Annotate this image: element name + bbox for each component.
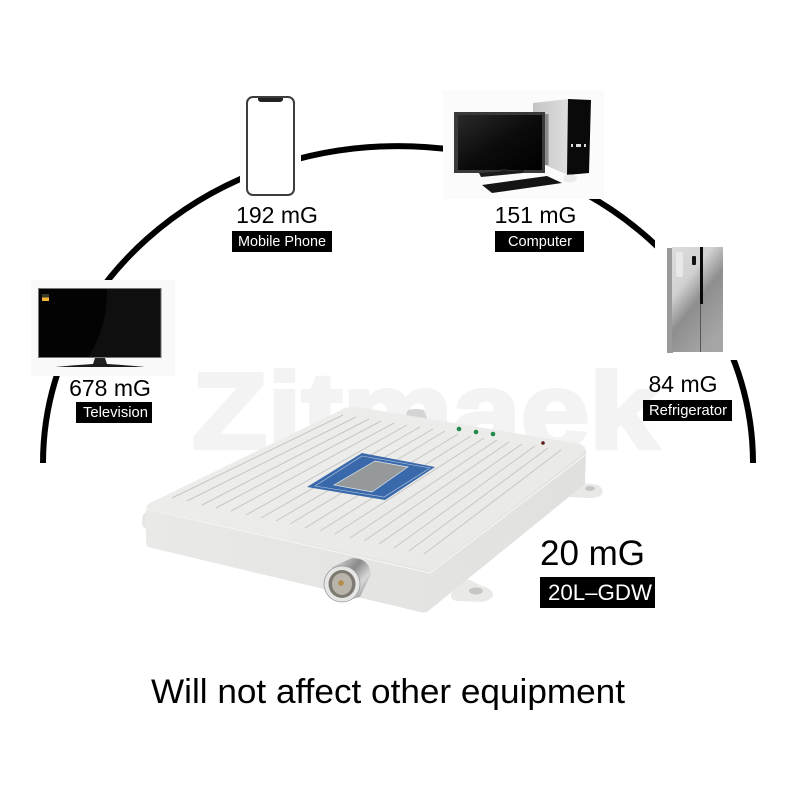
- panel: computer: [443, 90, 604, 252]
- icon: television: [38, 288, 161, 367]
- panel: mobile phone: [232, 92, 332, 252]
- panel: signal booster product: [142, 406, 602, 612]
- display panel inner border: [315, 456, 430, 497]
- keyboard: [482, 176, 562, 193]
- housing top: [146, 406, 585, 570]
- panel: television: [31, 280, 175, 423]
- mouse: [563, 174, 577, 182]
- label: computer: Computer: [508, 234, 572, 250]
- label: refrigerator: [643, 400, 732, 421]
- icon: computer: [454, 99, 591, 193]
- label: television: [76, 402, 152, 423]
- value: computer: 151 mG: [495, 202, 576, 228]
- vent slots: [172, 415, 561, 554]
- value: refrigerator: 84 mG: [648, 371, 718, 397]
- mounting tab right: [566, 484, 602, 498]
- label: mobile phone: [232, 231, 332, 252]
- product value: 20 mG: [540, 534, 645, 573]
- front N connector: [324, 558, 371, 602]
- label: computer: [495, 231, 584, 252]
- rear connector: [406, 409, 428, 420]
- value: mobile phone: 192 mG: [236, 202, 318, 228]
- mounting tab front: [451, 580, 493, 602]
- housing side: [146, 450, 586, 612]
- icon: mobile phone: [247, 97, 294, 195]
- tab holes: [469, 486, 595, 594]
- product model label: 20L–GDW: [548, 580, 652, 605]
- label: refrigerator: Refrigerator: [649, 403, 727, 419]
- refrigerator mask: [655, 200, 755, 360]
- watermark: Zitmaek: [192, 350, 659, 471]
- blue display panel: [307, 453, 435, 500]
- status LEDs: [457, 427, 545, 445]
- value: television: 678 mG: [69, 375, 151, 401]
- caption: Will not affect other equipment: [151, 673, 626, 711]
- arc connecting the devices: [43, 146, 753, 463]
- tower: [533, 99, 568, 175]
- phone mask: [240, 92, 301, 200]
- label: television: Television: [83, 405, 148, 421]
- icon: refrigerator: [667, 247, 723, 353]
- computer image backing: [443, 90, 604, 199]
- television image backing: [31, 280, 175, 376]
- label: mobile phone: Mobile Phone: [238, 234, 326, 250]
- monitor: [545, 114, 548, 165]
- lcd screen: [334, 461, 408, 492]
- panel: refrigerator: [643, 200, 755, 421]
